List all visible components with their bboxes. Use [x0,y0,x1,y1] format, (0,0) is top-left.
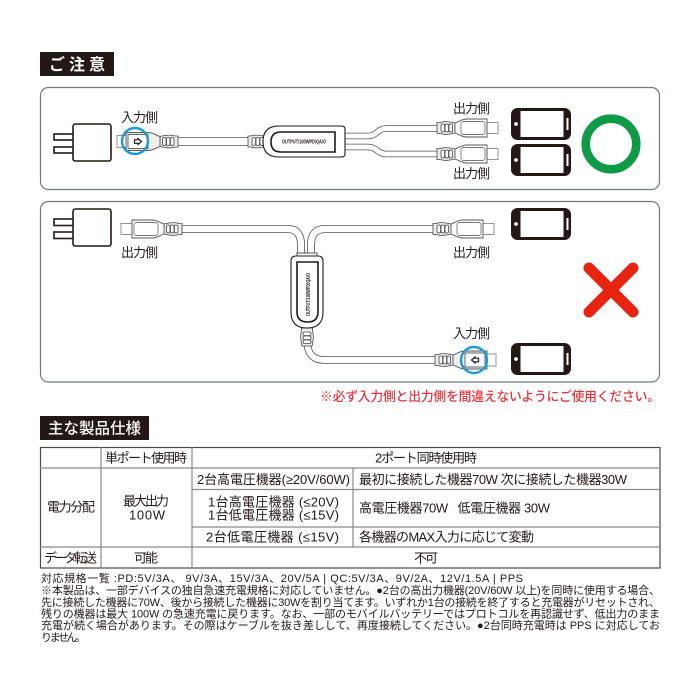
icon: phone bottom [511,343,571,375]
row: data transfer [44,550,438,566]
label: output side left: 出力側 [121,245,158,260]
heading: 主な製品仕様: 主な製品仕様 [48,420,141,438]
label: output side bottom: 出力側 [453,166,490,181]
row: data transfer: データ転送 [44,550,97,566]
footnotes: ※本製品は、一部デバイスの独自急速充電規格に対応していません。●2台の高出力機器(20V/60W 以上)を同時に使用する場合、 [41,583,660,597]
cable with splitter [176,126,439,157]
footnotes: 残りの機器は最大 100W の急速充電に戻ります。なお、一部のモバイルバッテリーではプロトコルを再認識せず、低出力のまま [41,606,660,620]
heading: ご注意 [40,52,114,76]
row: data transfer: 不可 [414,550,438,566]
row: mixed devices: 1台低電圧機器 (≤15V) [208,508,339,522]
warning text: ※必ず入力側と出力側を間違えないようにご使用ください。 [320,389,660,404]
heading: 主な製品仕様 [40,416,149,440]
cell: max output [123,494,169,522]
icon: green circle OK [586,119,636,169]
splitter box: OUTPUT/100WPD/QA/O [282,140,326,146]
connector: input side [435,347,496,373]
row: two low voltage devices: 各機器のMAX入力に応じて変動 [359,530,534,544]
footnotes: りません。 [41,631,86,644]
heading: ご注意: ご注意 [49,55,105,74]
icon: phone top [511,108,571,140]
row: mixed devices: 高電圧機器70W 低電圧機器 30W [359,500,551,516]
column headers: 単ポート使用時 [105,450,187,466]
connector: output 2 [437,145,498,163]
row: two high voltage devices: 2台高電圧機器(≥20V/60W) [197,472,350,487]
footnotes: 対応規格一覧 :PD:5V/3A、 9V/3A、15V/3A、20V/5A | QC:5V/3A、9V/2A、12V/1.5A | PPS [41,571,523,585]
icon: charger plug [54,124,111,161]
icon: red cross [589,268,633,312]
icon: phone bottom [511,144,571,176]
row: data transfer: 可能 [134,550,158,566]
splitter box [291,253,323,328]
row: mixed devices: 1台高電圧機器 (≤20V) [208,494,339,510]
panel: wrong connection [40,202,660,382]
icon: charger plug [54,209,111,246]
row: mixed devices [208,494,551,522]
cable with splitter [180,229,437,360]
row: two high voltage devices [197,472,628,487]
connector: left output [121,220,182,238]
row: two low voltage devices [206,530,534,544]
column headers [105,450,477,466]
column headers: 2ポート同時使用時 [375,450,477,466]
splitter box: OUTPUT/100WPD/QA/O [306,273,312,316]
label: input side: 入力側 [121,110,158,125]
footnotes: 充電が続く場合があります。その際はケーブルを抜き差しして、再度接続してください。●2台同時充電時は PPS に対応してお [41,618,660,632]
cell: max output: 100W [129,508,166,522]
row header: power distribution: 電力分配 [47,500,95,514]
panel: correct connection [40,88,660,190]
table: product specifications [40,447,660,568]
label: output side right: 出力側 [453,245,490,260]
footnotes [41,571,660,644]
cell: max output: 最大出力 [123,494,169,508]
icon: phone top [511,208,571,240]
label: output side top: 出力側 [453,101,490,116]
connector: input side [117,128,178,154]
row: two low voltage devices: 2台低電圧機器 (≤15V) [206,530,339,544]
connector: right output [433,220,494,238]
footnotes: 先に接続した機器に70W、後から接続した機器に30Wを割り当てます。いずれか1台の接続を終了すると充電器がリセットされ、 [41,595,660,609]
label: input side: 入力側 [453,326,490,341]
splitter box [263,126,345,157]
row: two high voltage devices: 最初に接続した機器70W 次に接続した機器30W [359,472,628,487]
connector: output 1 [437,119,498,137]
